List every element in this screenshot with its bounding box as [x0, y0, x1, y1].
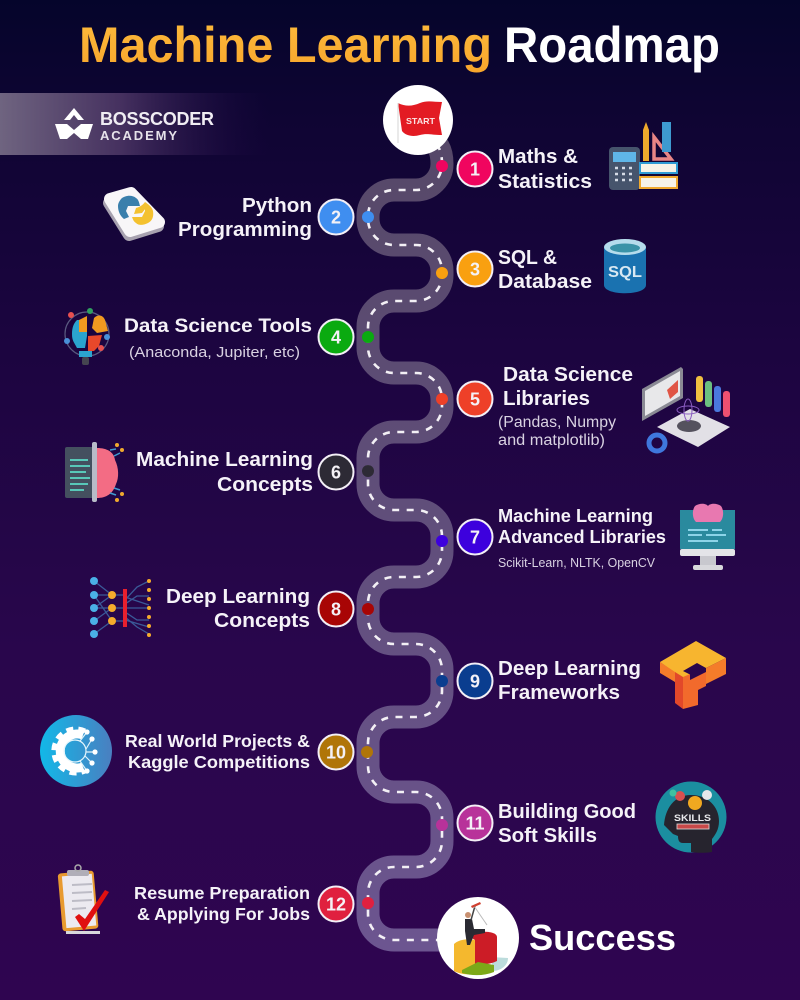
icon: monitor with brain — [680, 504, 735, 570]
step 3: SQL & — [498, 246, 557, 269]
step 7: 7 — [470, 528, 480, 548]
step 5: (Pandas, Numpy — [498, 414, 616, 431]
step 4: (Anaconda, Jupiter, etc) — [129, 344, 300, 361]
logo banner: ACADEMY — [100, 128, 177, 143]
step 1: 1 — [470, 160, 480, 180]
step 6: Concepts — [217, 474, 313, 496]
step 5: Data Science — [503, 363, 633, 386]
icon: code and brain — [65, 442, 124, 502]
step 11: Soft Skills — [498, 825, 597, 847]
road path — [368, 135, 442, 940]
step 10 — [125, 731, 354, 772]
logo banner — [0, 93, 270, 155]
start flag badge: START — [406, 116, 436, 126]
step 10: Real World Projects & — [125, 731, 310, 751]
step 7: Advanced Libraries — [498, 527, 666, 547]
step 2: Programming — [178, 218, 312, 241]
step 12: Resume Preparation — [134, 883, 310, 903]
step 12: & Applying For Jobs — [137, 904, 310, 924]
step 2: Python — [242, 194, 312, 217]
step 7: Scikit-Learn, NLTK, OpenCV — [498, 556, 656, 570]
step 5 — [458, 363, 633, 449]
step 12: 12 — [326, 894, 346, 914]
icon: puzzle light bulb — [64, 308, 110, 365]
icon: SQL database cylinder: SQL — [608, 264, 642, 281]
step 12 — [134, 883, 354, 924]
step 9 — [458, 658, 641, 704]
step 6 — [136, 449, 354, 496]
step 4: 4 — [331, 328, 341, 348]
step 4 — [124, 315, 354, 361]
step 11: 11 — [465, 814, 485, 834]
road milestone dots — [361, 160, 448, 909]
icon: TensorFlow logo — [660, 641, 726, 709]
step 2 — [178, 194, 354, 241]
step 11 — [458, 801, 636, 847]
step 5: Libraries — [503, 387, 590, 410]
title: Machine Learning — [79, 17, 492, 73]
step 5: and matplotlib) — [498, 432, 605, 449]
step 7 — [458, 506, 666, 570]
step 9: Frameworks — [498, 682, 620, 704]
title: Roadmap — [504, 17, 720, 73]
step 8 — [166, 586, 354, 632]
step 7: Machine Learning — [498, 506, 653, 526]
step 8: Concepts — [214, 610, 310, 632]
start flag badge — [383, 85, 453, 155]
success badge — [437, 897, 519, 979]
icon: calculator, books and rulers — [609, 122, 677, 190]
step 1: Maths & — [498, 145, 578, 168]
icon: python logo — [109, 193, 159, 235]
step 3: Database — [498, 270, 592, 293]
icon: skills head: SKILLS — [674, 813, 711, 823]
icon: data science workstation — [642, 367, 730, 451]
icon: skills head — [656, 782, 726, 853]
logo banner: BOSSCODER — [100, 109, 214, 129]
step 2: 2 — [331, 208, 341, 228]
step 9: 9 — [470, 672, 480, 692]
step 3 — [458, 246, 592, 293]
title — [79, 17, 720, 73]
step 6: Machine Learning — [136, 449, 313, 471]
icon: clipboard with check — [58, 865, 109, 934]
icon: gear network circle — [40, 715, 112, 787]
step 8: 8 — [331, 600, 341, 620]
step 10: Kaggle Competitions — [128, 752, 310, 772]
step 11: Building Good — [498, 801, 636, 823]
icon: SQL database cylinder — [604, 239, 646, 293]
icon: neural network — [90, 577, 151, 638]
step 4: Data Science Tools — [124, 315, 312, 337]
step 8: Deep Learning — [166, 586, 310, 608]
success label: Success — [529, 917, 676, 958]
step 1: Statistics — [498, 170, 592, 193]
step 10: 10 — [326, 742, 346, 762]
step 5: 5 — [470, 390, 480, 410]
step 9: Deep Learning — [498, 658, 641, 680]
step 1 — [458, 145, 592, 193]
step 6: 6 — [331, 462, 341, 482]
step 3: 3 — [470, 260, 480, 280]
